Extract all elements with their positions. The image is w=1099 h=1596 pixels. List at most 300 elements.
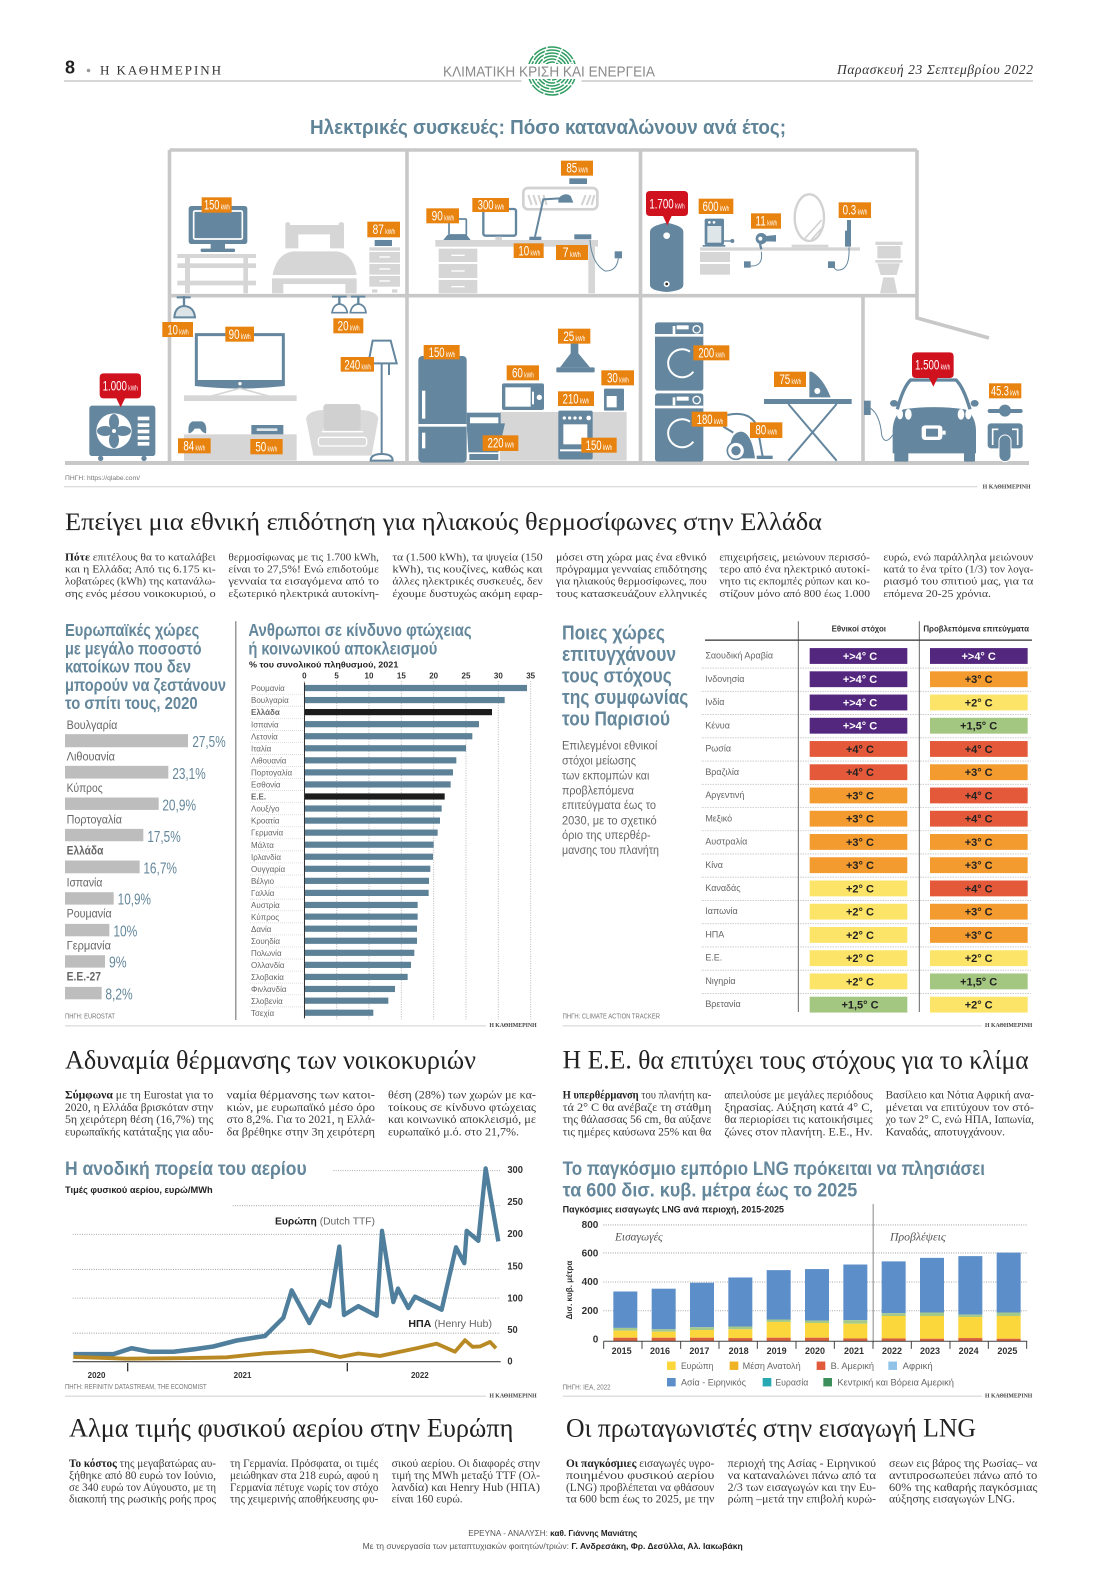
icon: dishwasher	[467, 413, 505, 460]
article text: Η υπερθέρμανση του πλανήτη κα-	[563, 1089, 712, 1102]
country labels: Ε.Ε.	[251, 792, 266, 802]
article text: Βασίλειο και Νότια Αφρική ανα-	[886, 1089, 1034, 1102]
panel: bathroom	[646, 191, 903, 293]
label: 30 kWh: 30 kWh	[607, 370, 629, 386]
icon: monitor	[483, 209, 516, 240]
country labels: Σλοβενία	[251, 997, 283, 1006]
row: Αυστραλία: +3° C	[846, 837, 874, 849]
country labels: Κροατία	[251, 817, 280, 826]
icon: device on nightstand	[375, 240, 392, 246]
series label: USA: ΗΠΑ (Henry Hub)	[408, 1319, 492, 1330]
article text: τα (1.500 kWh), τα ψυγεία (150	[392, 551, 543, 563]
callout: 1.500 kWh	[912, 352, 954, 387]
newspaper name: Η ΚΑΘΗΜΕΡΙΝΗ	[100, 62, 221, 78]
panel title: gas price: Η ανοδική πορεία του αερίου	[65, 1158, 307, 1180]
forecast label: Προβλέψεις	[889, 1230, 946, 1243]
axis values	[302, 671, 536, 680]
bar: Βουλγαρία: 27,5%	[192, 734, 226, 751]
article text: τα 600 bcm έως το 2025, με την	[566, 1493, 714, 1506]
article text: πρόγραμμα γενναίας επιδότησης	[556, 563, 708, 575]
bars	[613, 1253, 1021, 1341]
article text: είναι 160 ευρώ.	[392, 1493, 463, 1506]
label: 45.3 kWh: 45.3 kWh	[991, 383, 1019, 399]
row: Μεξικό	[705, 811, 1028, 827]
credits: Με τη συνεργασία των μεταπτυχιακών φοιτητών/τριών: Γ. Ανδρεσάκη, Φρ. Δεσύλλα, Αλ. Ιακωβάκη	[363, 1541, 743, 1551]
date: Παρασκευή 23 Σεπτεμβρίου 2022	[836, 62, 1033, 77]
label: 7 kWh: 7 kWh	[563, 244, 581, 260]
row: Μεξικό: Μεξικό	[705, 813, 732, 823]
column headers: Προβλεπόμενα επιτεύγματα	[923, 624, 1029, 634]
column headers	[832, 624, 1029, 634]
panel title: poverty risk: Ανθρωποι σε κίνδυνο φτώχειας	[248, 621, 472, 640]
row: ΗΠΑ: +2° C	[846, 930, 874, 942]
article text: Καναδάς, αποτυγχάνουν.	[886, 1126, 1005, 1138]
icon: vacuum cleaner	[723, 414, 773, 459]
article text: σε 340 ευρώ τον Αύγουστο, με τη	[69, 1482, 216, 1494]
icon: router	[574, 234, 591, 239]
article text: να καταναλώνει πάνω από τα	[728, 1470, 876, 1482]
panel description: επιτεύγματα έως το	[562, 800, 656, 812]
panel description: στόχοι μείωσης	[562, 755, 636, 768]
chart subtitle: Τιμές φυσικού αερίου, ευρώ/MWh	[65, 1185, 213, 1195]
credits: ΕΡΕΥΝΑ - ΑΝΑΛΥΣΗ: καθ. Γιάννης Μανιάτης	[468, 1528, 638, 1538]
icon: set top box	[251, 425, 283, 434]
article text: κιών, με ευρωπαϊκό μέσο όρο	[227, 1102, 375, 1114]
icon: television	[184, 335, 297, 401]
bar: Ρουμανία: Ρουμανία	[67, 907, 112, 921]
section: upper left column	[65, 508, 822, 1029]
row: Ινδονησία: +3° C	[965, 674, 993, 686]
headline: LNG importers: Οι πρωταγωνιστές στην εισαγωγή LNG	[566, 1413, 976, 1443]
row: Ιαπωνία: +2° C	[846, 906, 874, 919]
bar: Ελλάδα	[65, 844, 177, 878]
shelf and drawers	[700, 247, 860, 275]
axis values: 0	[507, 1356, 513, 1368]
country labels: Εσθονία	[251, 780, 281, 790]
label: 11 kWh: 11 kWh	[755, 213, 777, 229]
article text: 2/3 των εισαγωγών και την Ευ-	[728, 1482, 876, 1494]
series label: Europe: Ευρώπη (Dutch TTF)	[275, 1216, 375, 1228]
label: 600 kWh: 600 kWh	[703, 198, 729, 214]
panel description	[562, 741, 659, 857]
country labels: Λετονία	[251, 732, 278, 741]
year labels: 2023	[920, 1346, 940, 1356]
credits	[363, 1528, 743, 1551]
icon: iron	[809, 372, 831, 397]
row: Νιγηρία	[705, 973, 1028, 989]
axis values: 100	[507, 1293, 523, 1304]
country labels: Σλοβακία	[251, 973, 284, 982]
legend: Ευρασία	[775, 1377, 809, 1387]
country labels: Βέλγιο	[251, 877, 275, 886]
article text: θα περιορίσει τις κατοικήσιμες	[724, 1114, 873, 1126]
article text: ξηρασίας. Αύξηση κατά 4° C,	[724, 1102, 873, 1114]
icon: game controller	[188, 421, 206, 433]
panel: living room	[65, 296, 397, 482]
panel title: cannot heat home: με μεγάλο ποσοστό	[65, 639, 202, 658]
panel title: paris agreement: του Παρισιού	[562, 708, 670, 731]
year labels: 2021	[844, 1346, 864, 1356]
article text: στίζουν μόνο από 800 έως 1.000	[719, 588, 870, 600]
icon: ironing board	[764, 399, 852, 461]
row: Βρετανία: Βρετανία	[705, 999, 741, 1009]
article text: απειλούσε με μεγάλες περιόδους	[724, 1089, 873, 1102]
axis values: 15	[397, 671, 406, 680]
armchair	[306, 404, 378, 456]
bar: Κύπρος: Κύπρος	[67, 781, 103, 795]
row: Ινδονησία	[705, 671, 1028, 687]
year labels	[88, 1371, 429, 1380]
panel title: LNG trade: τα 600 δισ. κυβ. μέτρα έως το 2025	[563, 1180, 858, 1202]
axis values	[507, 1165, 523, 1368]
panel title: LNG trade	[563, 1158, 985, 1202]
nightstand	[369, 247, 400, 293]
panel title: paris agreement: της συμφωνίας	[562, 687, 688, 709]
callout: 1.700 kWh: 1.700 kWh	[649, 195, 685, 211]
icon: ac remote	[569, 178, 587, 184]
article text: λανδία) και Henry Hub (ΗΠΑ)	[392, 1482, 540, 1494]
bar: Βουλγαρία: Βουλγαρία	[67, 718, 117, 732]
country labels: Σουηδία	[251, 937, 280, 946]
row: ΗΠΑ: ΗΠΑ	[705, 930, 725, 940]
callout: 1.500 kWh: 1.500 kWh	[915, 356, 950, 372]
country labels	[251, 684, 292, 1018]
article text: θερμοσίφωνας με τις 1.700 kWh,	[228, 551, 379, 563]
icon: washing machine	[655, 322, 703, 391]
row: Ινδία	[705, 695, 1028, 710]
row: Βραζιλία: Βραζιλία	[705, 767, 740, 777]
label: 10 kWh: 10 kWh	[518, 242, 540, 258]
icon: ceiling lamps	[174, 296, 366, 317]
heading: appliances: Ηλεκτρικές συσκευές: Πόσο καταναλώνουν ανά έτος;	[310, 117, 786, 139]
icon: heater	[703, 219, 734, 247]
article text: ζώνες στον πλανήτη. Ε.Ε., Ην.	[724, 1126, 873, 1138]
row: Βραζιλία: +3° C	[965, 767, 993, 779]
row: Σαουδική Αραβία	[705, 648, 1028, 664]
row: Καναδάς: +2° C	[846, 883, 874, 896]
axis values: 150	[507, 1261, 523, 1272]
country labels: Ισπανία	[251, 720, 279, 729]
line chart: gas prices	[73, 1165, 523, 1380]
icon: desk lamp	[529, 194, 573, 240]
bar: Γερμανία	[65, 938, 127, 972]
article text: περιοχή της Ασίας - Ειρηνικού	[728, 1458, 876, 1470]
panel description: όριο της υπερθέρ-	[562, 830, 651, 842]
article text: μειώθηκαν στα 218 ευρώ, αφού η	[230, 1470, 379, 1482]
row: Σαουδική Αραβία: +>4° C	[843, 651, 877, 663]
row: Ινδία: +2° C	[965, 697, 993, 710]
article text: σικού αερίου. Οι διαφορές στην	[392, 1458, 540, 1470]
label: 300 kWh: 300 kWh	[478, 197, 504, 213]
year labels: 2020	[88, 1371, 106, 1380]
row: Ε.Ε.: Ε.Ε.	[705, 953, 722, 963]
country labels: Ολλανδία	[251, 961, 285, 970]
article text: τις ημέρες καύσωνα 25% και θα	[563, 1126, 712, 1138]
icon: water heater	[650, 223, 683, 292]
row: Ινδία: +>4° C	[843, 697, 877, 710]
icon: bedroom tv	[189, 206, 247, 252]
country labels: Μάλτα	[251, 841, 274, 850]
row: Μεξικό: +3° C	[846, 814, 874, 826]
bar: Ε.Ε.-27: 8,2%	[105, 986, 133, 1003]
panel description: 2030, με το σχετικό	[562, 815, 657, 827]
row: Ε.Ε.	[705, 950, 1028, 966]
row: Κένυα: Κένυα	[705, 720, 731, 730]
bar: Ρουμανία	[65, 907, 137, 940]
toilet	[875, 242, 903, 293]
article text: ναμία θέρμανσης των κατοι-	[227, 1089, 375, 1102]
axis title: Δισ. κυβ. μέτρα	[564, 1260, 574, 1320]
row: ΗΠΑ: +3° C	[965, 930, 993, 942]
article text: ποιημένου φυσικού αερίου	[566, 1470, 714, 1482]
country labels: Πολωνία	[251, 949, 282, 958]
row: Κίνα	[705, 857, 1028, 873]
axis values: 250	[507, 1197, 523, 1208]
bar: Ελλάδα: 16,7%	[143, 860, 177, 878]
row: Αργεντινή: +3° C	[846, 790, 874, 803]
row: Μεξικό: +4° C	[965, 814, 993, 826]
row: Κένυα: +1,5° C	[960, 721, 997, 733]
legend: Ασία - Ειρηνικός	[681, 1377, 747, 1387]
label: 240 kWh: 240 kWh	[344, 356, 371, 372]
country labels: Ουγγαρία	[251, 865, 285, 874]
bar: Γερμανία: Γερμανία	[67, 938, 111, 952]
icon: microwave	[502, 383, 544, 410]
article text: ρώπη –μετά την επιβολή κυρώ-	[728, 1493, 876, 1506]
panel title: paris agreement	[562, 622, 688, 731]
article text: (LNG) προβλέπεται να φθάσουν	[566, 1482, 714, 1494]
bar chart: cannot heat home	[65, 718, 226, 1003]
axis values: 0	[593, 1334, 599, 1346]
row: Αυστραλία: +3° C	[965, 837, 993, 849]
article text: διακοπή της ρωσικής ροής προς	[69, 1493, 217, 1506]
axis values: 0	[302, 671, 307, 680]
panel title: cannot heat home: Ευρωπαϊκές χώρες	[65, 621, 199, 640]
year labels: 2018	[729, 1346, 749, 1356]
article text: αντιπροσωπεύει πάνω από το	[889, 1470, 1037, 1482]
article text: στο 8,2%. Για το 2021, η Ελλά-	[227, 1114, 375, 1126]
article text: Σύμφωνα με τη Eurostat για το	[65, 1089, 213, 1102]
year labels: 2022	[882, 1346, 902, 1356]
label: 150 kWh: 150 kWh	[204, 197, 230, 213]
label: 180 kWh: 180 kWh	[697, 411, 723, 427]
panel: upper rooms left	[177, 160, 622, 293]
article text: ευρώ, ενώ παράλληλα μειώνουν	[883, 551, 1034, 563]
row: Καναδάς: Καναδάς	[705, 883, 741, 893]
icon: cable and plug	[590, 240, 622, 271]
label: 50 kWh: 50 kWh	[255, 438, 277, 454]
headline: EU climate targets: Η Ε.Ε. θα επιτύχει τους στόχους για το κλίμα	[563, 1045, 1029, 1075]
label: 210 kWh: 210 kWh	[563, 390, 589, 406]
panel title: paris agreement: τους στόχους	[562, 665, 672, 688]
icon: hair dryer	[744, 233, 776, 268]
article text: τερο από ένα ηλεκτρικό αυτοκί-	[719, 563, 870, 575]
row: Βραζιλία	[705, 764, 1028, 780]
label: 87 kWh: 87 kWh	[373, 221, 395, 237]
article text: γενναία τα εισαγόμενα από το	[227, 575, 379, 587]
bar: Ελλάδα: Ελλάδα	[67, 844, 104, 858]
row: Κίνα: Κίνα	[705, 860, 724, 870]
icon: dryer	[655, 393, 703, 462]
article text: τά 2° C θα ανέβαζε τη στάθμη	[563, 1102, 712, 1114]
country labels: Λιθουανία	[251, 756, 287, 765]
country labels: Ιταλία	[251, 744, 272, 753]
article text	[566, 1458, 1038, 1506]
axis values: 400	[582, 1277, 599, 1288]
axis values	[582, 1220, 599, 1346]
article text: επιχειρήσεις, μειώνουν περισσό-	[719, 551, 870, 563]
legend: Κεντρική και Βόρεια Αμερική	[837, 1377, 954, 1387]
icon: laptop	[443, 219, 471, 240]
legend	[667, 1361, 954, 1387]
article text: τοίκους σε κίνδυνο φτώχειας	[388, 1102, 537, 1114]
axis values: 300	[507, 1165, 523, 1176]
brand tag: Η ΚΑΘΗΜΕΡΙΝΗ	[489, 1022, 537, 1029]
article text	[65, 1089, 537, 1138]
row: Αργεντινή: +4° C	[965, 790, 993, 803]
article text: τιμή της MWh μεταξύ TTF (Ολ-	[392, 1470, 540, 1482]
axis values: 200	[582, 1306, 599, 1317]
article text: 5η χειρότερη θέση (16,7%) της	[65, 1114, 214, 1126]
legend: Ευρώπη	[681, 1361, 713, 1371]
article text: λοβατώρες (kWh) της κατανάλω-	[65, 575, 216, 587]
icon: scooter	[988, 405, 1023, 462]
brand tag: Η ΚΑΘΗΜΕΡΙΝΗ	[985, 1392, 1032, 1400]
article text: αύξησης εισαγωγών LNG.	[889, 1493, 1015, 1506]
bars	[304, 685, 527, 1016]
bed	[272, 222, 357, 293]
article text: 2020, η Ελλάδα βρισκόταν στην	[65, 1102, 213, 1114]
panel description: των εκπομπών και	[562, 770, 650, 783]
panel description: προβλεπόμενα	[562, 785, 634, 797]
headline: heating weakness: Αδυναμία θέρμανσης των νοικοκυριών	[65, 1045, 476, 1075]
house walls	[170, 150, 989, 463]
year labels: 2016	[650, 1346, 670, 1356]
panel title: poverty risk: ή κοινωνικού αποκλεισμού	[248, 639, 437, 658]
row: Ιαπωνία: Ιαπωνία	[705, 906, 738, 916]
country labels: Πορτογαλία	[251, 768, 292, 778]
row: Ινδονησία: Ινδονησία	[705, 674, 745, 684]
row: Κένυα	[705, 718, 1028, 734]
article text	[563, 1089, 1034, 1138]
line: USA	[73, 1340, 496, 1359]
article text: δα βρέθηκε στην 3η χειρότερη	[227, 1126, 375, 1138]
axis values: 30	[494, 671, 503, 680]
article text: τη Γερμανία. Πρόσφατα, οι τιμές	[230, 1458, 379, 1470]
label: 84 kWh: 84 kWh	[183, 438, 205, 454]
panel title: cannot heat home: μπορούν να ζεστάνουν	[65, 676, 226, 695]
article text: kWh), τις κουζίνες, καθώς και	[392, 563, 543, 575]
headline: solar heaters: Επείγει μια εθνική επιδότηση για ηλιακούς θερμοσίφωνες στην Ελλάδα	[65, 508, 822, 536]
article text: ευρωπαϊκής κατάταξης για αδυ-	[65, 1126, 214, 1138]
row: Κένυα: +>4° C	[843, 721, 877, 733]
bar: Πορτογαλία: 17,5%	[147, 829, 181, 846]
article text: έχουμε δυστυχώς ακόμη εφαρ-	[392, 588, 543, 600]
article text: κατά το ένα τρίτο (1/3) τον λογα-	[883, 563, 1034, 575]
icon: cooker hood	[556, 342, 595, 372]
column headers: Εθνικοί στόχοι	[832, 624, 886, 634]
year labels	[612, 1346, 1017, 1356]
tv stand	[177, 254, 256, 293]
country labels: Ελλάδα	[251, 708, 280, 717]
icon: cooker	[558, 411, 593, 459]
country labels: Γερμανία	[251, 829, 283, 838]
callout: 1.000 kWh	[100, 373, 141, 407]
row: Σαουδική Αραβία: +>4° C	[961, 651, 996, 663]
row: Καναδάς	[705, 881, 1028, 896]
table: national targets vs projected results	[702, 621, 1032, 1013]
icon: coffee maker	[604, 389, 624, 411]
axis values: 35	[526, 671, 536, 680]
bar: Λιθουανία: 23,1%	[172, 766, 206, 783]
row: Νιγηρία: +1,5° C	[960, 976, 997, 989]
row: Σαουδική Αραβία: Σαουδική Αραβία	[705, 651, 774, 661]
panel title: cannot heat home: κατοίκων που δεν	[65, 657, 191, 677]
bar: Βουλγαρία	[65, 718, 226, 751]
row: Βρετανία	[705, 997, 1028, 1013]
article text: μένεται να επιτύχουν τον στό-	[886, 1102, 1034, 1114]
label: 7 kWh	[556, 244, 588, 260]
row: Ρωσία	[705, 741, 1028, 757]
chart subtitle: Παγκόσμιες εισαγωγές LNG ανά περιοχή, 2015-2025	[563, 1204, 784, 1215]
article text: ξήθηκε από 80 ευρώ τον Ιούνιο,	[69, 1470, 216, 1482]
icon: charger and cable	[864, 401, 894, 440]
legend: Μέση Ανατολή	[743, 1361, 801, 1371]
year labels: 2020	[805, 1346, 825, 1356]
label: 90 kWh: 90 kWh	[432, 207, 454, 223]
counter	[500, 412, 627, 461]
axis values: 600	[582, 1248, 599, 1260]
label: 220 kWh: 220 kWh	[488, 435, 514, 451]
imports label: Εισαγωγές	[614, 1230, 663, 1243]
article text: της χειμερινής αποθήκευσης φυ-	[230, 1493, 379, 1506]
legend: Αφρική	[903, 1361, 933, 1371]
row: Κίνα: +3° C	[846, 860, 874, 872]
article text: είναι το 27,5%! Ενώ επιδοτούμε	[228, 563, 380, 575]
row: Αργεντινή	[705, 788, 1028, 803]
source note: ΠΗΓΗ: https://qlabe.com/	[65, 475, 140, 482]
section: upper right column	[555, 551, 1034, 1029]
row: Ε.Ε.: +2° C	[846, 953, 874, 965]
year labels: 2024	[959, 1346, 980, 1356]
article text: θέση (28%) των χωρών με κα-	[388, 1089, 536, 1102]
article text: τους κατασκευάζουν ελληνικές	[556, 588, 708, 600]
section: lower left column	[65, 1045, 540, 1506]
year labels: 2025	[997, 1346, 1017, 1356]
bar: Πορτογαλία: Πορτογαλία	[67, 813, 122, 827]
row: Βρετανία: +2° C	[965, 999, 993, 1012]
row: Νιγηρία: Νιγηρία	[705, 976, 736, 986]
bar: Ε.Ε.-27: Ε.Ε.-27	[67, 970, 101, 984]
source note: ΠΗΓΗ: IEA, 2022	[563, 1384, 611, 1392]
bar: Λιθουανία: Λιθουανία	[67, 749, 115, 764]
label: 20 kWh: 20 kWh	[338, 318, 360, 334]
icon: fingerprint logo	[528, 47, 576, 95]
desk	[435, 240, 598, 293]
axis values: 20	[429, 671, 439, 680]
article text: ριασμό του σπιτιού μας, για τα	[883, 575, 1034, 587]
icon: air conditioner	[523, 188, 597, 209]
panel description: Επιλεγμένοι εθνικοί	[562, 741, 658, 753]
panel title: paris agreement: Ποιες χώρες	[562, 622, 665, 645]
bar: Ισπανία: 10,9%	[118, 891, 151, 909]
article text: νητο τις εκπομπές ρύπων και κο-	[719, 575, 870, 587]
country labels: Φινλανδία	[251, 985, 287, 994]
row: Ινδονησία: +>4° C	[843, 674, 877, 686]
article text: σης ενός μέσου νοικοκυριού, ο	[65, 588, 216, 600]
article text: μόσει στη χώρα μας ένα εθνικό	[556, 551, 707, 563]
headline: gas price jump: Αλμα τιμής φυσικού αερίου στην Ευρώπη	[69, 1413, 513, 1443]
